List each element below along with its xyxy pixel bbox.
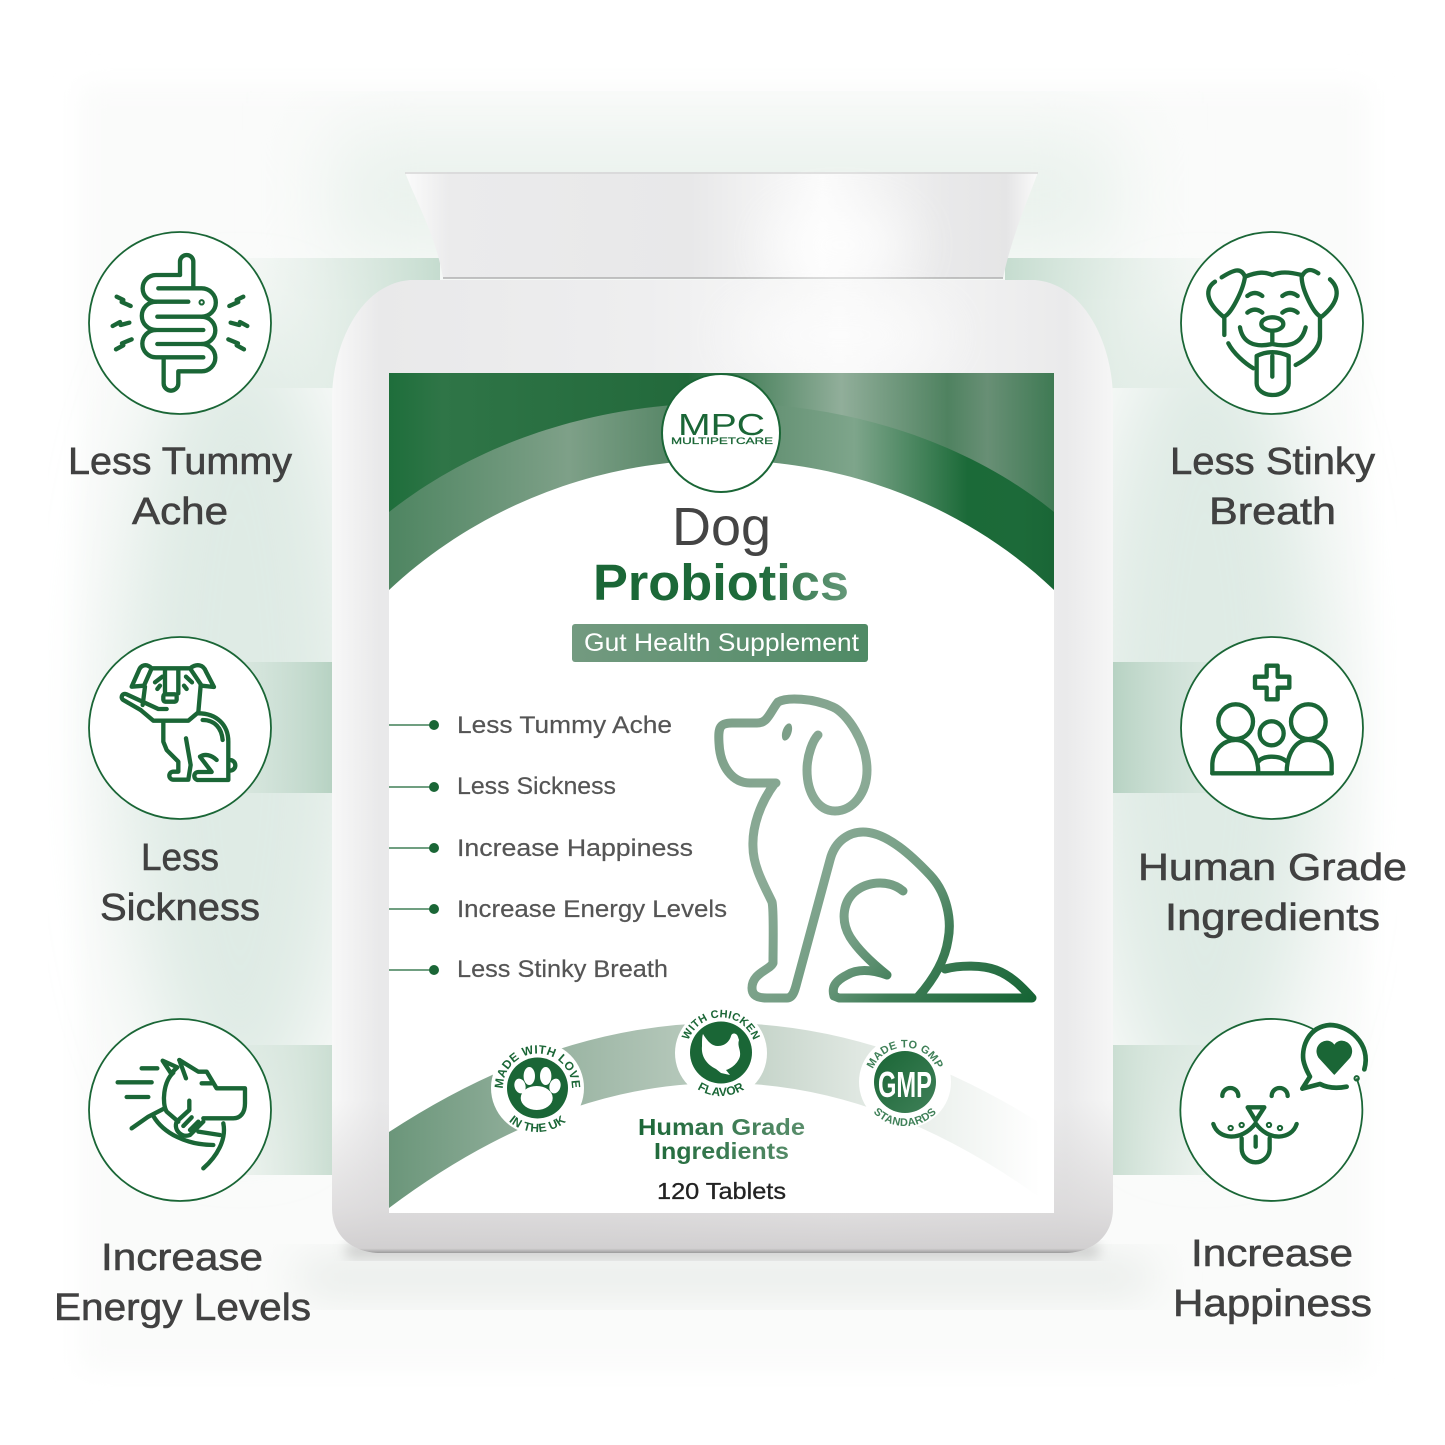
benefits list [389,712,727,983]
feature: human grade ingredients [1138,637,1407,939]
feature label: Less [141,837,219,879]
feature label: Sickness [100,887,260,929]
product title: Dog [672,497,771,557]
bottle shadow [345,1242,1100,1259]
icon: intestine [113,255,247,391]
badge: GMP standards: GMP [878,1064,932,1105]
icon: chicken [702,1033,740,1075]
tablet count: 120 Tablets [657,1178,786,1204]
icon: running dog [118,1060,245,1168]
human grade ingredients [638,1114,805,1164]
badge: with chicken flavor: FLAVOR [698,1082,744,1096]
badge: made with love in the UK: MADE WITH LOVE [494,1045,580,1088]
logo [662,374,780,492]
feature: increase happiness [1173,1019,1372,1325]
benefits list: Increase Energy Levels [457,896,727,923]
badge: made with love in the UK: IN THE UK [509,1115,566,1132]
feature label [1173,1233,1372,1325]
label sheet [389,373,1054,1213]
icon: smiling dog with heart bubble [1213,1025,1366,1162]
feature label: Less Stinky [1170,441,1375,483]
product title [593,497,849,611]
bottle [332,172,1113,1259]
feature label: Increase [101,1237,263,1279]
feature label [68,441,292,533]
feature label: Energy Levels [54,1287,311,1329]
icon: sick dog with thermometer [122,665,235,780]
icon: paw [513,1067,562,1110]
feature: increase energy levels [54,1019,311,1329]
icon: family with medical cross [1212,666,1332,773]
badge: made with love in the UK [491,1045,584,1132]
benefits list: Less Tummy Ache [457,712,672,739]
icon: happy dog with tongue [1208,270,1337,395]
benefits list: Less Stinky Breath [457,956,668,983]
subtitle pill [572,624,868,662]
feature label: Ache [132,491,228,533]
feature label [1170,441,1375,533]
feature label: Increase [1191,1233,1353,1275]
badge: with chicken flavor: WITH CHICKEN [681,1010,760,1040]
feature label: Breath [1209,491,1336,533]
feature label: Happiness [1173,1283,1372,1325]
feature label [54,1237,311,1329]
benefits list: Increase Happiness [457,835,693,862]
logo: MPC [678,407,765,442]
bottom arc band [389,1023,1054,1208]
label top arc [389,373,1054,600]
feature: less tummy ache [68,232,292,533]
bottle cap [405,172,1038,280]
feature: less sickness [89,637,271,929]
badge: GMP standards [859,1040,951,1126]
feature: less stinky breath [1170,232,1375,533]
feature label: Human Grade [1138,847,1407,889]
feature label [1138,847,1407,939]
badge: GMP standards: STANDARDS [874,1108,936,1126]
feature label [100,837,260,929]
logo: MULTIPETCARE [671,436,773,447]
bottle body [332,280,1113,1253]
badge: with chicken flavor [675,1010,767,1096]
subtitle pill: Gut Health Supplement [584,629,859,657]
benefits list: Less Sickness [457,773,616,800]
human grade ingredients: Ingredients [654,1138,789,1164]
feature label: Ingredients [1165,897,1380,939]
product label [389,373,1054,1213]
human grade ingredients: Human Grade [638,1114,805,1140]
badge: GMP standards: MADE TO GMP [866,1040,943,1068]
feature label: Less Tummy [68,441,292,483]
product title: Probiotics [593,554,849,611]
dog outline illustration [719,699,1032,998]
